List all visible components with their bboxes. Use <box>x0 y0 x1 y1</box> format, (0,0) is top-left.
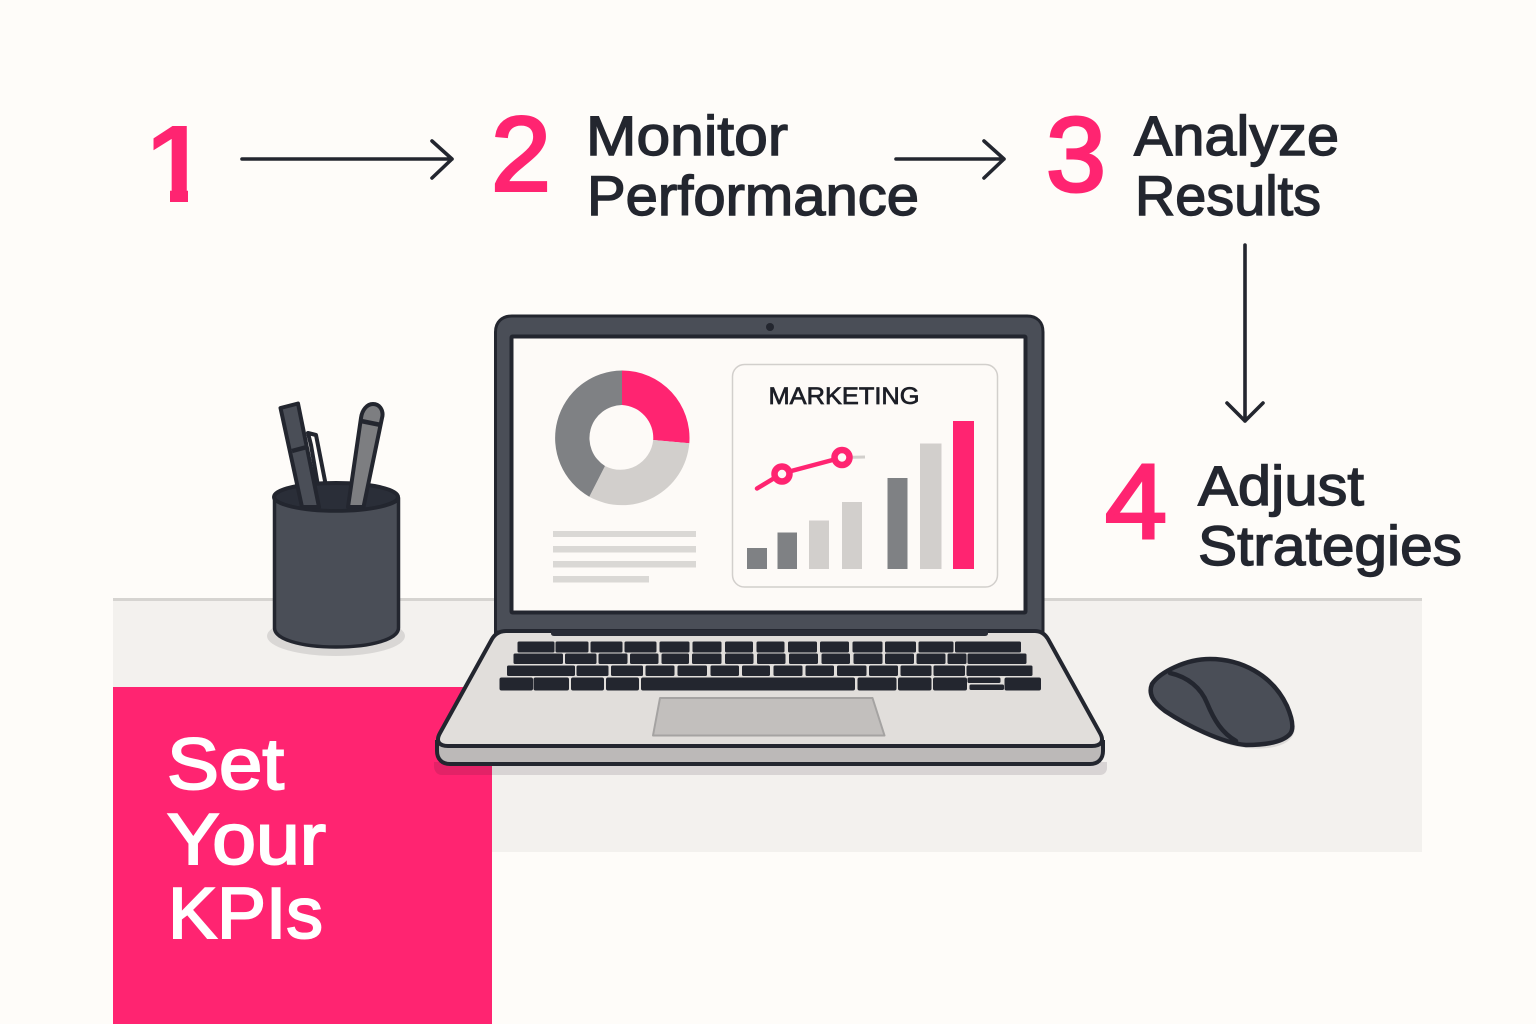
step 1 number: 1 <box>146 103 207 226</box>
bar chart <box>747 421 974 569</box>
laptop keyboard deck <box>438 631 1102 746</box>
step 3 label: Analyze <box>1134 104 1339 167</box>
step 4 number: 4 <box>1105 443 1167 561</box>
panel: desk surface <box>113 598 1422 852</box>
clip of pen <box>308 433 326 486</box>
panel: marketing chart <box>732 364 998 587</box>
step 2 label: Monitor <box>586 104 788 167</box>
heading: set your KPIs: KPIs <box>168 874 323 954</box>
step 4 label <box>1198 454 1462 577</box>
mouse button divider <box>1170 673 1236 741</box>
heading: set your KPIs: Set <box>167 725 284 805</box>
icon: pen holder <box>267 404 405 656</box>
step 3 label: Results <box>1135 164 1321 227</box>
trackpad <box>653 698 884 736</box>
step 4 label: Adjust <box>1198 454 1364 517</box>
icon: mouse <box>1151 659 1295 749</box>
keyboard <box>500 642 1041 690</box>
cup interior <box>274 483 398 511</box>
panel: set your KPIs <box>113 687 492 1024</box>
cup body <box>274 498 398 647</box>
arrow: step 2 to step 3 <box>896 141 1004 178</box>
step 2 label: Performance <box>587 164 919 227</box>
step 3 label <box>1134 104 1339 227</box>
step 2 number: 2 <box>491 96 551 214</box>
donut chart <box>555 370 690 505</box>
arrow: step 3 to step 4 <box>1227 245 1263 421</box>
heading: set your KPIs: Your <box>167 800 326 880</box>
step 2 label <box>586 104 919 227</box>
step 4 label: Strategies <box>1198 514 1462 577</box>
screen <box>514 338 1024 610</box>
laptop front lip <box>437 742 1103 764</box>
webcam <box>766 323 774 331</box>
pens inside cup <box>280 404 383 507</box>
laptop hinge <box>551 630 988 636</box>
legend text lines <box>553 531 696 582</box>
step 3 number: 3 <box>1046 96 1106 214</box>
arrow: step 1 to step 2 <box>242 141 452 178</box>
heading: set your KPIs <box>167 725 326 954</box>
line chart <box>757 450 865 488</box>
icon: laptop <box>434 316 1107 775</box>
laptop lid <box>496 316 1043 632</box>
laptop shadow <box>434 762 1107 775</box>
chart title: MARKETING <box>768 383 920 410</box>
